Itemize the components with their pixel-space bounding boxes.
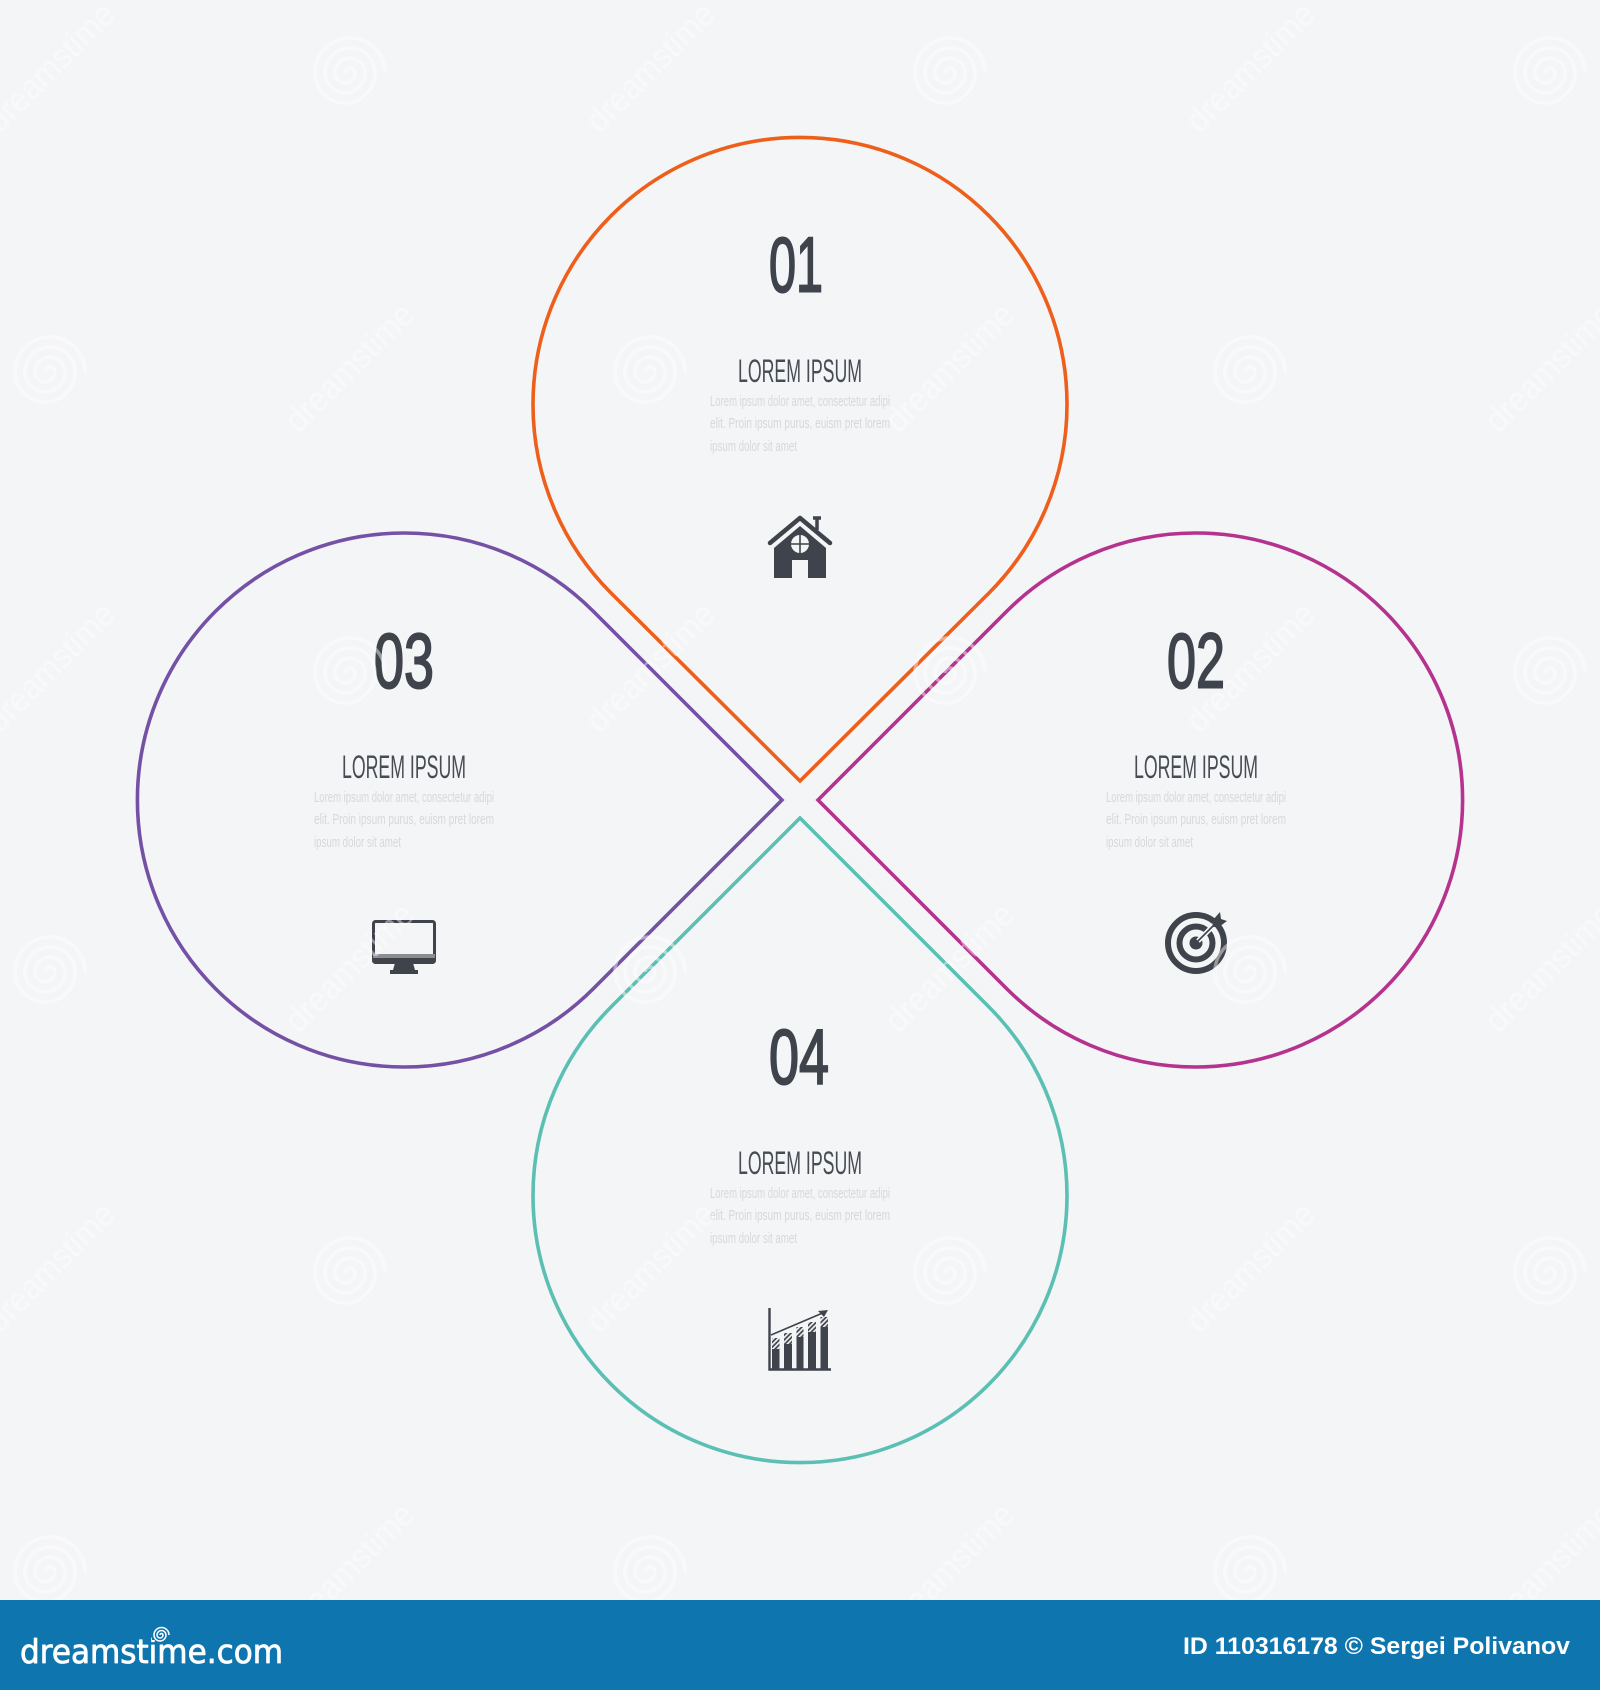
body text: Lorem ipsum dolor amet, consectetur adipi [710,393,890,410]
body text: Lorem ipsum dolor amet, consectetur adipi [710,1185,890,1202]
number 02: 02 [1167,616,1225,704]
heading: LOREM IPSUM [342,749,466,785]
heading: LOREM IPSUM [738,353,862,389]
footer bar [0,1600,1600,1690]
petal outline: orange [533,137,1067,781]
panel: step 01 [533,137,1067,781]
body text: elit. Proin ipsum purus, euism pret lorem [710,1207,890,1224]
body text: Lorem ipsum dolor amet, consectetur adipi [1106,789,1286,806]
body text [1106,789,1286,851]
body text [314,789,494,851]
watermark overlay: dreamstime [1179,596,1323,740]
icon: monitor [373,922,435,974]
watermark overlay: dreamstime [278,1496,422,1640]
heading: LOREM IPSUM [1134,749,1258,785]
icon: bar chart [770,1308,831,1370]
watermark overlay: dreamstime [878,296,1022,440]
watermark overlay: dreamstime [1179,1196,1323,1340]
number 01: 01 [769,220,823,308]
icon: target [1168,912,1227,971]
watermark overlay: dreamstime [579,1196,723,1340]
watermark overlay: dreamstime [579,596,723,740]
watermark overlay: dreamstime [878,1496,1022,1640]
watermark overlay: dreamstime [278,896,422,1040]
petal outline: teal [533,818,1067,1463]
heading: LOREM IPSUM [738,1145,862,1181]
body text: Lorem ipsum dolor amet, consectetur adipi [314,789,494,806]
icon: house [770,518,830,578]
body text: ipsum dolor sit amet [314,834,402,851]
body text: ipsum dolor sit amet [710,1230,798,1247]
panel: step 03 [137,533,782,1067]
body text: elit. Proin ipsum purus, euism pret lorem [1106,811,1286,828]
body text: ipsum dolor sit amet [1106,834,1194,851]
number 03: 03 [374,616,434,704]
panel: step 04 [533,818,1067,1463]
body text: elit. Proin ipsum purus, euism pret lorem [314,811,494,828]
body text: elit. Proin ipsum purus, euism pret lorem [710,415,890,432]
panel: step 02 [818,533,1463,1067]
number 04: 04 [769,1012,829,1100]
petal outline: purple [137,533,782,1067]
petal outline: magenta [818,533,1463,1067]
watermark overlay: dreamstime [878,896,1022,1040]
footer logo: dreamstime.com [20,1632,283,1671]
footer credit: ID 110316178 © Sergei Polivanov [1183,1633,1571,1660]
body text [710,1185,890,1247]
watermark overlay: dreamstime [278,296,422,440]
body text: ipsum dolor sit amet [710,438,798,455]
body text [710,393,890,455]
